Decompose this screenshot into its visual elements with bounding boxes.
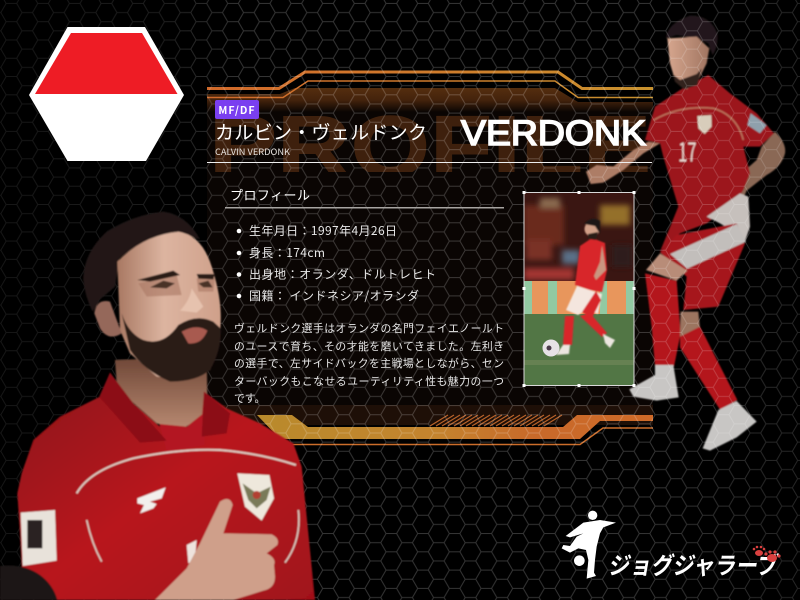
profile facts list bbox=[237, 222, 436, 304]
beard bbox=[122, 313, 221, 382]
header rule bbox=[207, 162, 652, 163]
nose highlight bbox=[180, 288, 203, 313]
sleeve badge bbox=[21, 510, 57, 566]
foreground head bbox=[0, 566, 57, 600]
logo: paw prints bbox=[753, 546, 781, 562]
player name katakana: カルビン・ヴェルドンク bbox=[215, 118, 427, 145]
back calf skin bbox=[680, 312, 700, 337]
biography paragraph: のユースで育ち、その才能を磨いてきました。左利き bbox=[234, 338, 504, 354]
side piping bbox=[87, 510, 299, 563]
logo: silhouette player bbox=[562, 511, 616, 579]
beard bbox=[673, 68, 702, 89]
chest piping bbox=[77, 450, 296, 493]
lips bbox=[182, 327, 207, 344]
position badge bbox=[215, 100, 259, 119]
flag: Indonesia hexagon bbox=[29, 27, 184, 161]
section heading: プロフィール bbox=[230, 185, 310, 204]
left player figure bbox=[0, 212, 315, 600]
back boot bbox=[703, 401, 757, 451]
photo: action shot bbox=[524, 193, 634, 386]
eyebrows bbox=[137, 271, 215, 282]
right player figure bbox=[586, 16, 785, 451]
biography paragraph: の選手で、左サイドバックを主戦場としながら、セン bbox=[234, 355, 504, 371]
crest bbox=[697, 115, 712, 134]
shirt tail bbox=[707, 193, 750, 242]
face bbox=[667, 37, 709, 89]
jersey bbox=[645, 75, 774, 252]
shorts bbox=[660, 223, 745, 310]
profile facts list: 国籍： インドネシア/オランダ bbox=[249, 287, 419, 304]
near arm bbox=[586, 142, 660, 184]
collar left bbox=[99, 373, 167, 443]
thigh bbox=[646, 253, 687, 281]
biography paragraph: ターバックもこなせるユーティリティ性も魅力の一つ bbox=[234, 373, 504, 389]
neck bbox=[115, 357, 207, 430]
far arm with tattoo bbox=[716, 132, 785, 217]
hair bbox=[666, 16, 717, 55]
shorts white panel bbox=[670, 224, 746, 269]
face bbox=[117, 232, 221, 380]
logo: wordmark: ジョグジャラーブ bbox=[607, 546, 782, 581]
back leg bbox=[680, 327, 737, 411]
photo frame bbox=[522, 191, 636, 387]
watermark: PROFILE: PROFILE bbox=[209, 99, 651, 195]
ear bbox=[94, 301, 122, 337]
panel: dark backing bbox=[207, 110, 653, 415]
bottom frame: orange bars bbox=[257, 415, 653, 444]
panel: lower brown band bbox=[207, 405, 653, 425]
photo player bbox=[556, 219, 615, 355]
profile facts list: 出身地：オランダ、ドルトレヒト bbox=[249, 266, 436, 282]
player name latin: CALVIN VERDONK bbox=[215, 145, 290, 158]
biography paragraph bbox=[234, 320, 504, 406]
biography paragraph: です。 bbox=[234, 390, 265, 406]
eye socket shadow bbox=[138, 275, 215, 297]
collar right bbox=[202, 392, 230, 437]
biography paragraph: ヴェルドンク選手はオランダの名門フェイエノールト bbox=[234, 320, 504, 336]
eyes bbox=[150, 281, 213, 288]
number 17: 17 bbox=[678, 133, 696, 170]
profile facts list: 身長：174cm bbox=[249, 244, 325, 261]
front leg bbox=[645, 273, 681, 367]
photo ball bbox=[542, 340, 560, 356]
hair bbox=[83, 212, 200, 312]
hand bbox=[155, 499, 278, 600]
jersey yoke line bbox=[654, 108, 743, 140]
position badge: MF/DF bbox=[218, 103, 256, 118]
crest bbox=[237, 473, 274, 521]
surname title: VERDONK bbox=[461, 114, 646, 153]
jersey bbox=[17, 373, 315, 600]
sleeve patch bbox=[747, 113, 767, 133]
sponsor logo bbox=[137, 487, 166, 513]
top frame: orange lines bbox=[207, 72, 653, 112]
jersey number fragment bbox=[187, 540, 197, 563]
inner collar bbox=[159, 413, 205, 452]
front boot bbox=[629, 365, 679, 401]
profile facts list: 生年月日：1997年4月26日 bbox=[249, 222, 397, 239]
